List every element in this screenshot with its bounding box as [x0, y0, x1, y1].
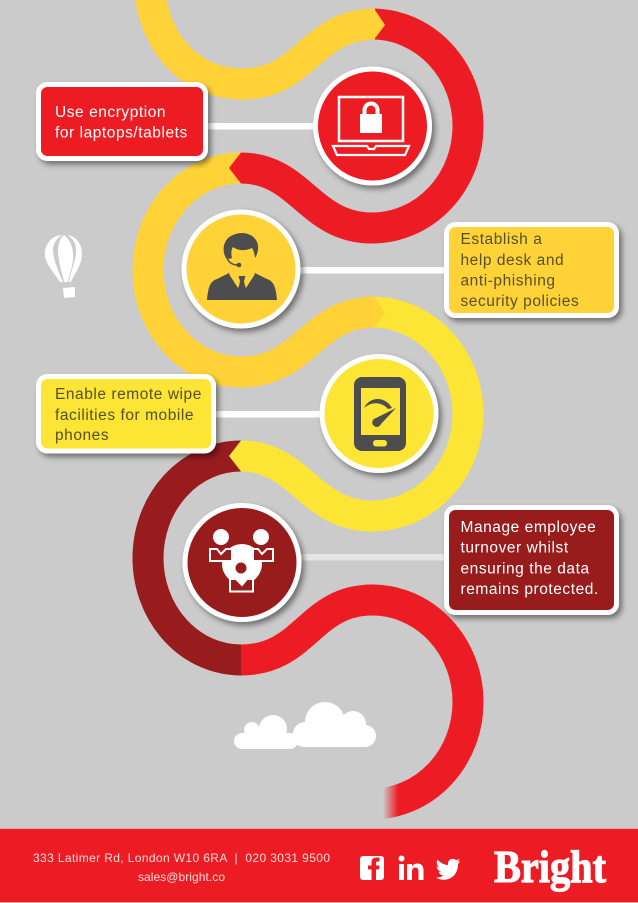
- right cloud: [293, 702, 376, 747]
- callout: help desk: security policies: [460, 293, 579, 310]
- agent headset microphone: [227, 258, 238, 265]
- ribbon: dark red arc: [148, 456, 241, 660]
- circle: team meeting: [185, 506, 299, 620]
- icon: three people at table: [210, 529, 273, 592]
- ribbon: red arc: [229, 24, 468, 228]
- footer email: sales@bright.co: [138, 870, 225, 884]
- left cloud: [234, 715, 298, 749]
- ribbon: final red segment: [241, 600, 468, 825]
- icon: facebook: [360, 856, 384, 880]
- logo: Bright: Bright: [494, 841, 607, 892]
- callout: remote wipe: Enable remote wipe: [55, 386, 202, 403]
- callout: encryption: [38, 84, 206, 158]
- circle: smartphone: [322, 356, 436, 470]
- ribbon: bright yellow segment: [229, 312, 468, 516]
- icon: twitter: [436, 859, 460, 880]
- connector lines: [205, 123, 446, 560]
- ribbon: winding path: [148, 0, 468, 825]
- footer address: 333 Latimer Rd, London W10 6RA | 020 3031 9500: [33, 851, 330, 865]
- callout: employee turnover: [446, 508, 616, 612]
- callout: encryption: Use encryption: [55, 104, 166, 121]
- callout: employee turnover: ensuring the data: [460, 560, 590, 578]
- agent hair: [224, 233, 258, 259]
- ribbon: amber arc: [148, 168, 385, 372]
- icon: clouds: [234, 702, 376, 749]
- callout: help desk: help desk and: [460, 252, 564, 269]
- callout: encryption: for laptops/tablets: [55, 124, 188, 142]
- callout: help desk: anti-phishing: [460, 272, 556, 290]
- callout: remote wipe: [38, 376, 214, 451]
- agent collar: [229, 269, 255, 288]
- icon: headset agent: [207, 233, 277, 300]
- agent tie: [238, 276, 246, 296]
- callout: remote wipe: phones: [55, 427, 109, 444]
- circle: laptop: [316, 69, 430, 183]
- callout: employee turnover: turnover whilst: [460, 540, 569, 556]
- callout: help desk: [446, 224, 616, 316]
- agent body: [207, 272, 277, 300]
- circle: support agent: [184, 212, 298, 326]
- footer band: [0, 828, 638, 903]
- ribbon: top amber segment: [150, 0, 385, 84]
- icon: phone with gauge: [354, 377, 406, 451]
- icon: linkedin: [398, 856, 424, 880]
- callout: remote wipe: facilities for mobile: [55, 407, 194, 424]
- icon: laptop with padlock: [333, 97, 409, 155]
- callout: employee turnover: Manage employee: [460, 519, 596, 536]
- icon: hot air balloon: [45, 235, 82, 298]
- callout: employee turnover: remains protected.: [460, 581, 599, 598]
- callout: help desk: Establish a: [460, 231, 542, 248]
